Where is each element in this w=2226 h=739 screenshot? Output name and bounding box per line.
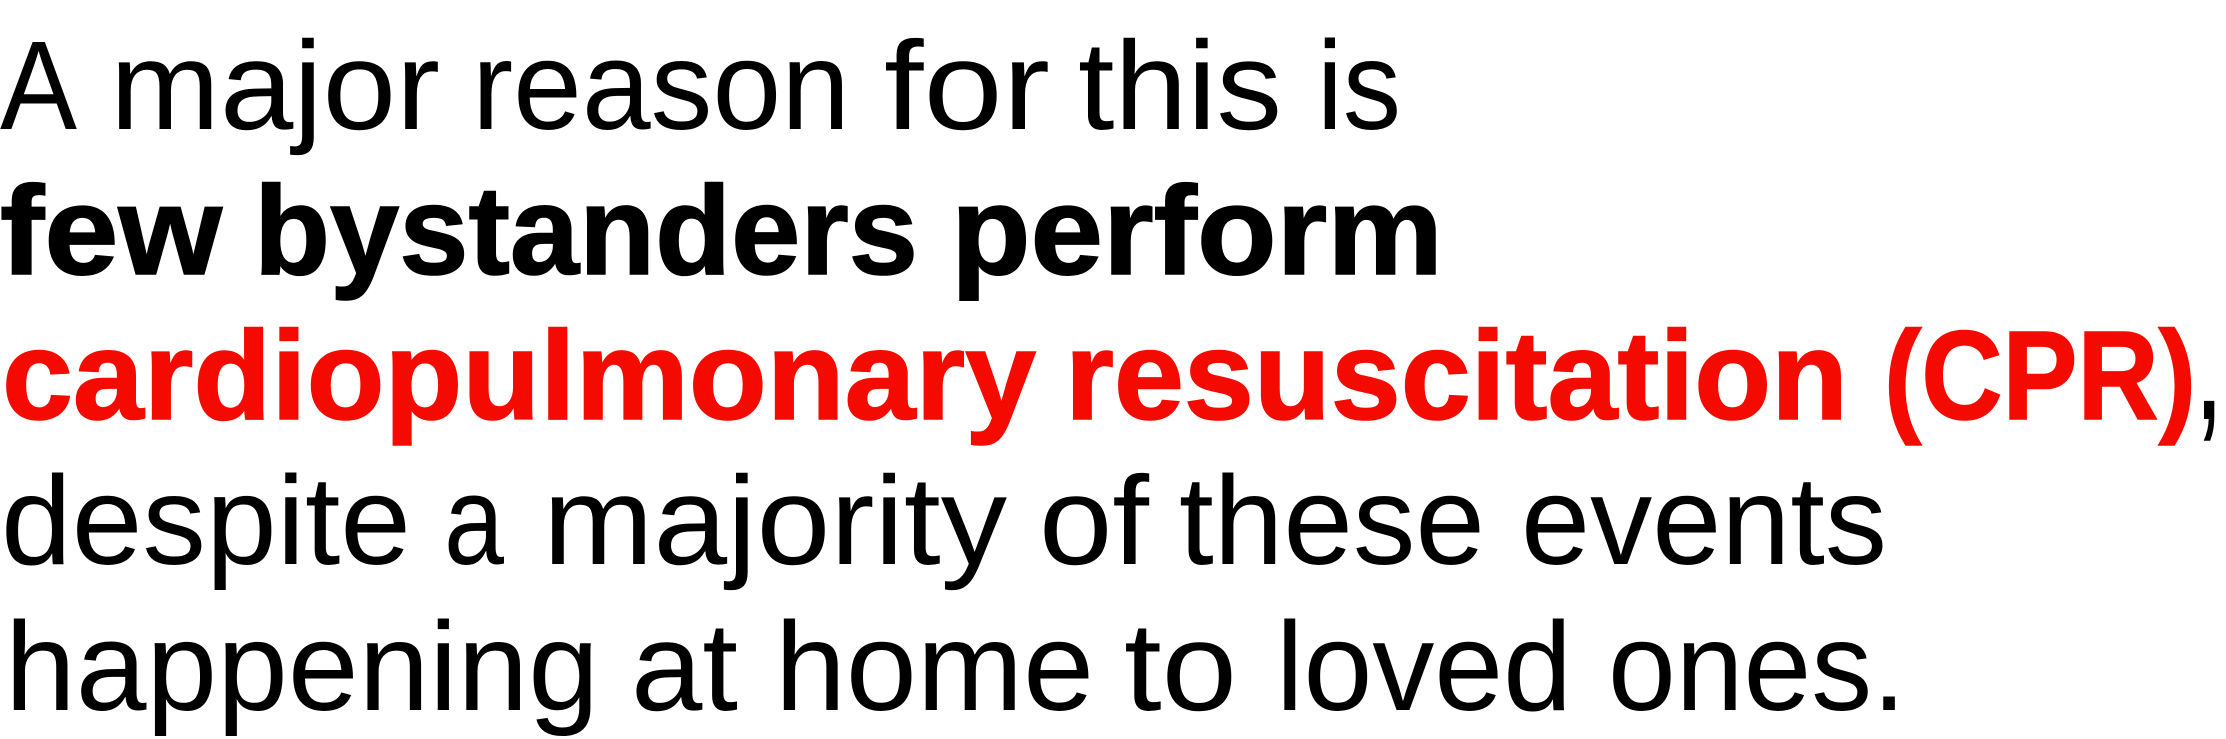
line 5: home: [775, 596, 1094, 737]
line 1: is: [1317, 15, 1401, 156]
line 5: happening: [5, 596, 599, 737]
line 3: red bold term: resuscitation: [1065, 305, 1848, 446]
line 5: loved: [1276, 596, 1572, 737]
line 1: for: [884, 15, 1050, 156]
line 4: majority: [543, 450, 1007, 591]
line 5: ones.: [1608, 596, 1906, 737]
line 1: this: [1078, 15, 1282, 156]
line 4: despite: [1, 450, 411, 591]
line 1: A: [0, 15, 77, 156]
line 4: a: [444, 450, 505, 591]
line 4: these: [1179, 450, 1485, 591]
line 1: reason: [472, 15, 850, 156]
line 2: bold: [0, 160, 1443, 301]
line 5: [5, 596, 1906, 737]
line 2: bold: perform: [951, 160, 1443, 301]
line 4: [1, 450, 1887, 591]
line 1: [0, 15, 1401, 156]
line 5: to: [1124, 596, 1237, 737]
line 5: at: [631, 596, 738, 737]
line 1: major: [110, 15, 440, 156]
line 2: bold: bystanders: [254, 160, 918, 301]
line 3: red bold term: [2, 266, 2224, 456]
line 4: events: [1521, 450, 1887, 591]
line 4: of: [1039, 450, 1150, 591]
line 2: bold: few: [0, 160, 223, 301]
line 3: red bold term: (CPR): [1884, 305, 2196, 446]
line 3: red bold term: cardiopulmonary: [2, 305, 1036, 446]
